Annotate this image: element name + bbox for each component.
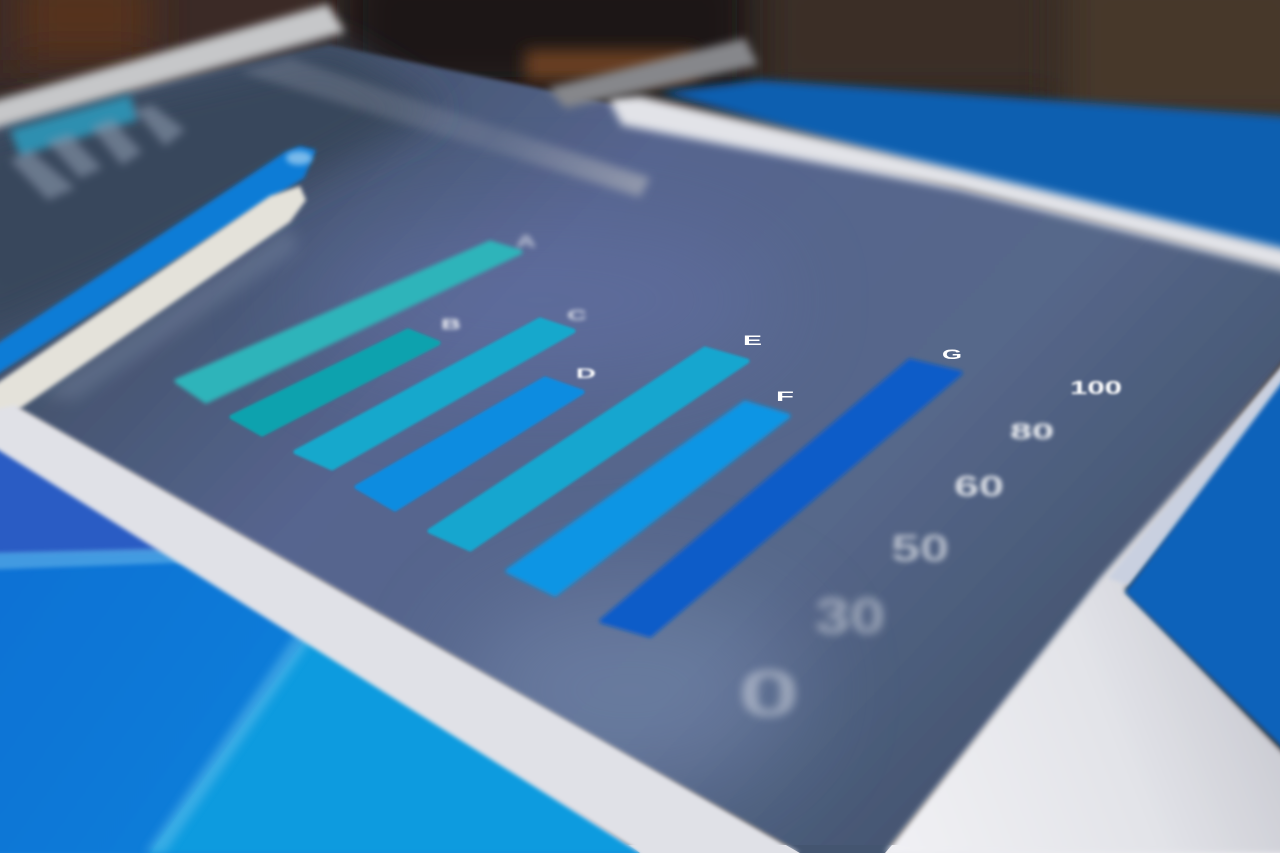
band: lower left white edge bbox=[0, 405, 800, 853]
legend: blurred top-left chips bbox=[10, 95, 185, 200]
label D: D bbox=[576, 365, 596, 381]
axis 60: 60 bbox=[954, 471, 1004, 503]
glow: lower paper highlight bbox=[460, 590, 800, 790]
axis labels bbox=[738, 378, 1122, 730]
bar C bbox=[296, 320, 573, 468]
bar F bbox=[508, 403, 788, 594]
base: bottom edge colour strip bbox=[0, 845, 1280, 853]
label A: A bbox=[516, 232, 536, 251]
axis 100: 100 bbox=[1070, 378, 1122, 398]
bar D bbox=[357, 379, 582, 509]
glow: paper highlight bbox=[300, 220, 780, 380]
bar chart bbox=[177, 243, 960, 635]
line: pale diagonal streak bbox=[145, 628, 315, 853]
heading: blurred paper title bbox=[240, 58, 650, 197]
icon: white pencil bbox=[0, 186, 306, 432]
axis 80: 80 bbox=[1010, 419, 1054, 444]
panel: bottom right white sheet and right edge bbox=[885, 345, 1280, 853]
band: top left white edge bbox=[0, 4, 345, 135]
bar labels bbox=[441, 232, 962, 404]
label E: E bbox=[743, 332, 762, 348]
shadow: pencil reflection on paper bbox=[40, 225, 298, 400]
panel: darker indigo corner of blue sheet bbox=[0, 430, 180, 555]
label C: C bbox=[567, 307, 587, 324]
axis 50: 50 bbox=[891, 528, 949, 570]
icon: pencil tip highlight bbox=[286, 151, 312, 165]
panel: right blue sheet bbox=[1125, 345, 1280, 775]
bar E bbox=[430, 349, 747, 549]
axis 30: 30 bbox=[815, 588, 885, 644]
label F: F bbox=[776, 388, 795, 404]
label B: B bbox=[441, 316, 461, 333]
panel: bottom left blue sheet bbox=[0, 420, 640, 853]
panel: dark left paper shading bbox=[0, 45, 440, 350]
axis 0: 0 bbox=[738, 656, 800, 730]
object: blurred grey device at top bbox=[548, 38, 758, 108]
line: pale streak across blue sheet bbox=[0, 548, 200, 570]
bar G bbox=[602, 361, 960, 635]
bar B bbox=[232, 331, 438, 434]
bar A bbox=[177, 243, 520, 401]
band: right edge tint bbox=[1108, 358, 1280, 585]
label G: G bbox=[942, 346, 962, 362]
panel: lighter cyan facet of blue sheet bbox=[150, 632, 640, 853]
band: top right white edge bbox=[608, 96, 1280, 285]
icon: blue pencil bbox=[0, 146, 316, 385]
panel: top right blue sheet bbox=[660, 80, 1280, 270]
